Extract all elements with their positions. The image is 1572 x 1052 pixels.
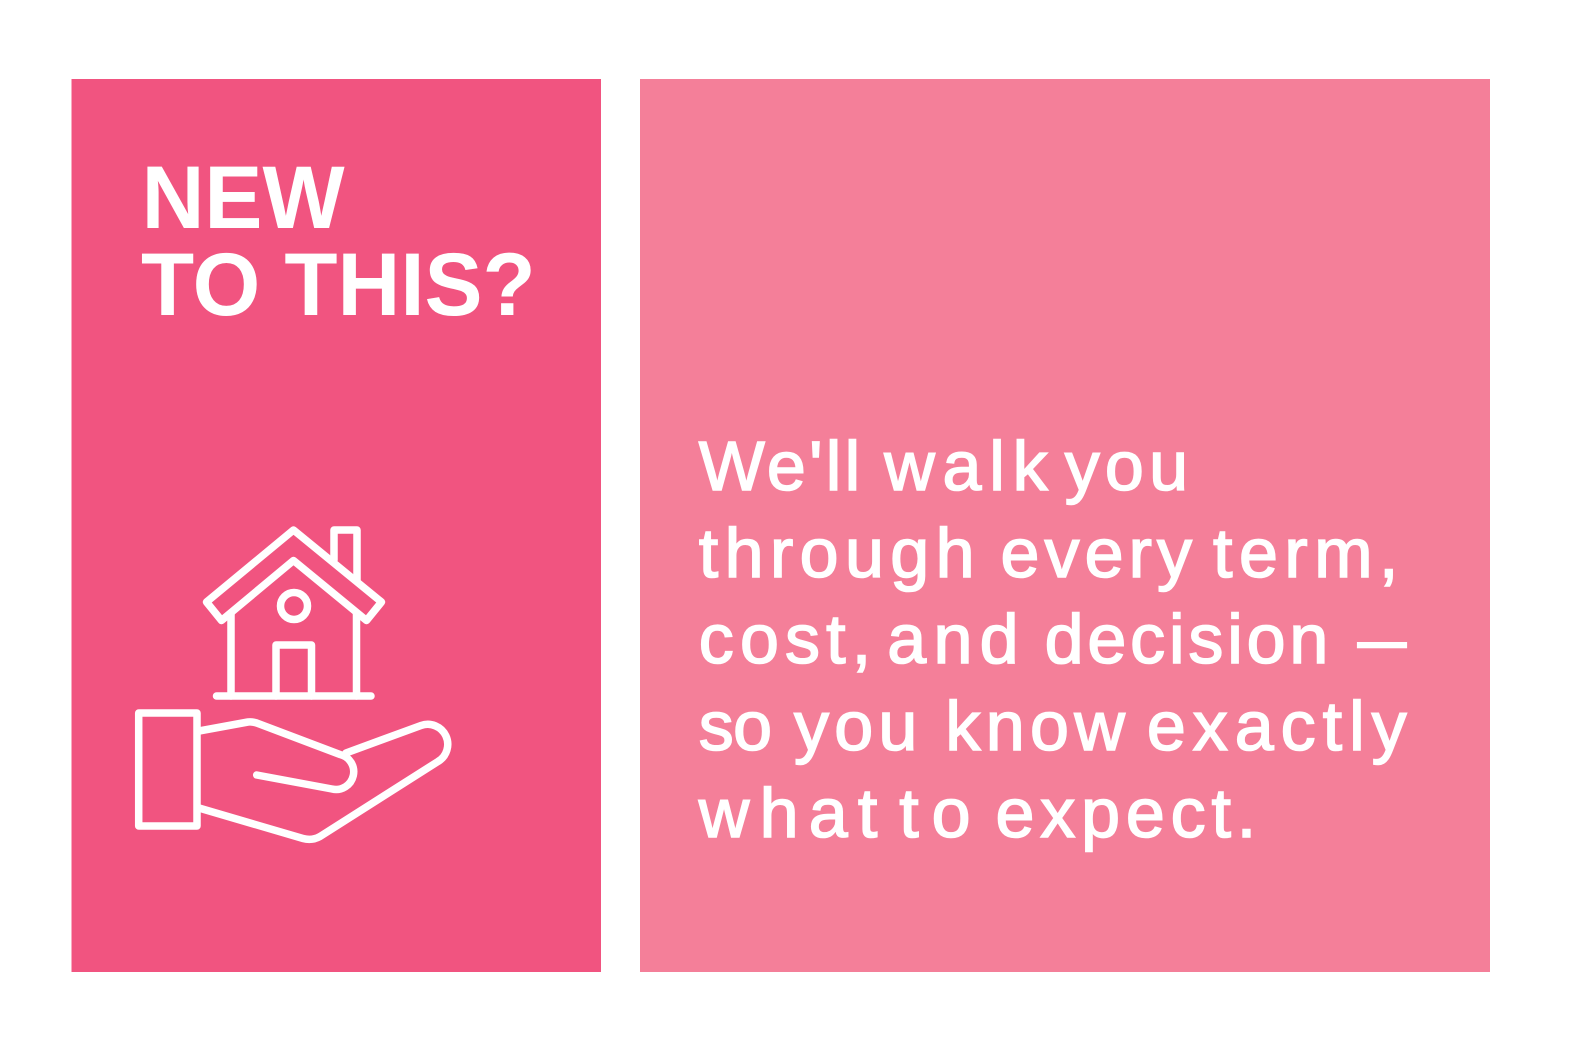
text block: explanation (698, 427, 1407, 852)
text line 2: every (1000, 514, 1192, 592)
icon part: fingers (199, 724, 448, 839)
text line 4: exactly (1147, 687, 1407, 765)
text line 2: term, (1213, 514, 1398, 592)
text line 1: you (1065, 427, 1188, 505)
icon part: roof (206, 530, 382, 620)
text line 5: what (698, 774, 877, 852)
text line 3: cost, (699, 600, 871, 678)
icon part: window (280, 592, 308, 620)
text line 5: expect. (996, 774, 1256, 852)
text line 3 (699, 600, 1406, 678)
text line 2: through (699, 514, 974, 592)
heading: new to this: TO THIS? (141, 234, 536, 334)
icon: hand holding house (139, 530, 448, 839)
icon part: door (276, 645, 312, 696)
icon part: cuff (139, 713, 197, 826)
text line 1 (699, 427, 1188, 505)
text line 4: you (794, 687, 917, 765)
heading: new to this: NEW (142, 147, 345, 247)
text line 4 (699, 687, 1407, 765)
icon part: hand (199, 722, 354, 789)
panel: left heading panel (72, 79, 601, 972)
icon part: chimney (334, 530, 357, 580)
text line 4: know (945, 687, 1125, 765)
text line 1: walk (883, 427, 1049, 505)
text line 4: so (699, 687, 772, 765)
icon part: ground line (216, 692, 371, 700)
text line 3: and (887, 600, 1019, 678)
text line 5 (698, 774, 1256, 852)
heading: new to this (141, 147, 536, 334)
icon part: house walls (231, 614, 356, 696)
text line 3: — (1358, 600, 1406, 678)
text line 5: to (899, 774, 970, 852)
text line 2 (699, 514, 1398, 592)
text line 3: decision (1045, 600, 1328, 678)
text line 1: We'll (699, 427, 860, 505)
panel: right explanation panel (640, 79, 1490, 972)
